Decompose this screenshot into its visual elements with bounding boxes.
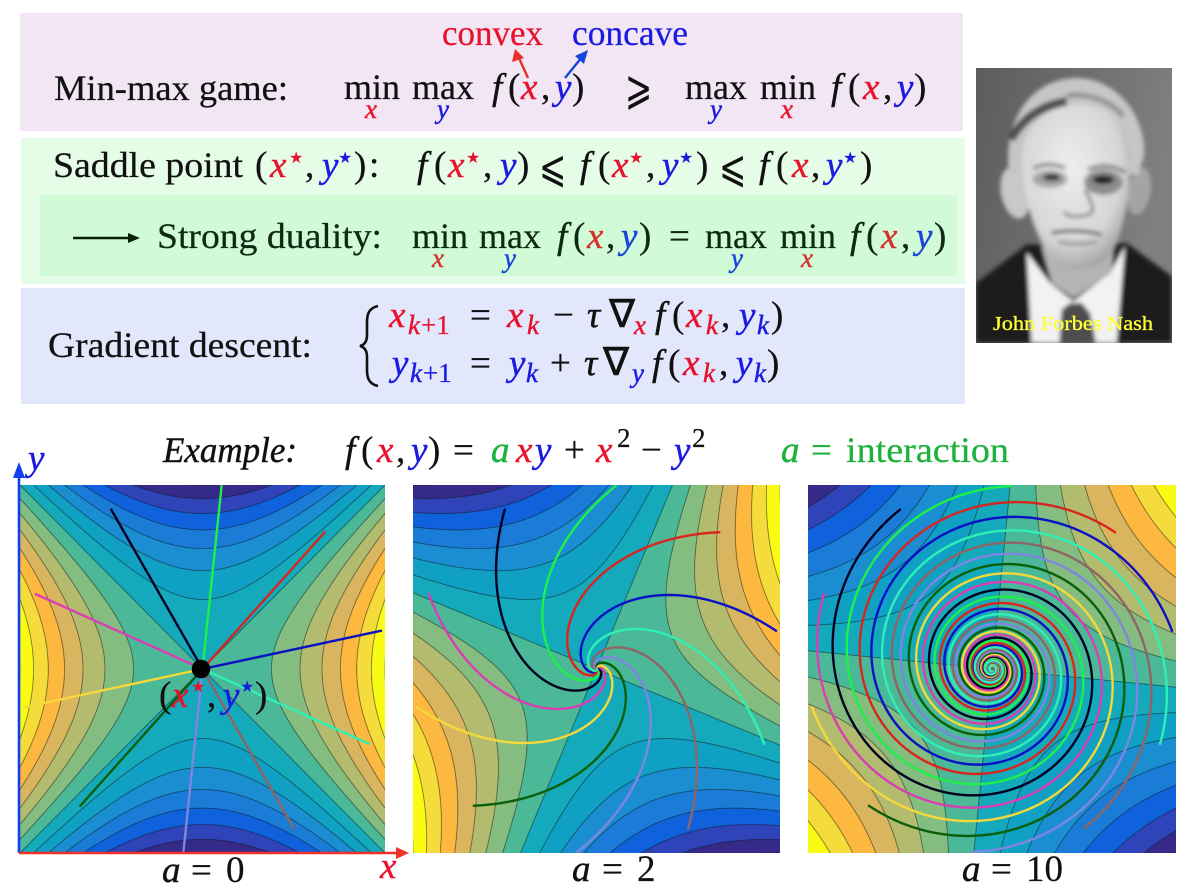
formula: saddle inequality: x (611, 145, 629, 186)
formula: y update: , (719, 343, 728, 384)
formula: strong duality equality: y (617, 216, 638, 257)
formula: max min f(x,y): x (780, 94, 793, 124)
formula: saddle inequality: ) (860, 145, 872, 186)
formula: strong duality equality (412, 216, 946, 273)
formula: saddle point coordinates: ★ (289, 148, 303, 167)
formula: x update (388, 293, 783, 340)
formula: min max f(x,y): f (492, 67, 507, 108)
formula: min max f(x,y): ) (572, 67, 584, 108)
formula: f(x,y) definition: x (515, 430, 533, 471)
formula: strong duality equality: ( (866, 216, 878, 257)
formula: y update: x (682, 343, 700, 384)
label: a = 0: 0 (226, 850, 244, 891)
panel: strong duality (40, 195, 957, 276)
formula: y update: +1 (423, 358, 452, 388)
formula: y update: y (629, 358, 644, 388)
label: saddle point (x*, y*): y (219, 675, 240, 716)
formula: strong duality equality: y (912, 216, 933, 257)
y axis arrow (13, 462, 25, 853)
formula: saddle inequality: , (483, 145, 492, 186)
arrow: to concave (565, 50, 588, 78)
saddle point marker (192, 660, 210, 678)
formula: x update: x (633, 310, 646, 340)
formula: saddle point coordinates: y (318, 145, 339, 186)
formula: f(x,y) definition: ) (428, 430, 440, 471)
label: saddle point (x*, y*): ( (159, 675, 171, 716)
formula: saddle inequality: f (417, 145, 432, 186)
label: a = 10: = (991, 849, 1012, 890)
formula: strong duality equality: min (780, 216, 836, 256)
formula: saddle inequality: ★ (843, 148, 857, 167)
formula: y update: ∇ (602, 341, 630, 384)
formula: saddle point coordinates (255, 145, 379, 186)
label: gradient descent: Gradient descent: (48, 325, 312, 365)
formula: max min f(x,y): , (883, 67, 892, 108)
formula: y update: y (505, 343, 526, 384)
formula: saddle point coordinates: ) (354, 145, 366, 186)
label: y axis: y (24, 438, 45, 479)
formula: saddle inequality: f (759, 145, 774, 186)
formula: strong duality equality: = (669, 216, 690, 257)
formula: f(x,y) definition: , (396, 430, 405, 471)
formula: max min f(x,y): min (760, 67, 816, 107)
label: a = 10: a (962, 849, 980, 890)
formula: saddle inequality: ⩽ (539, 142, 566, 193)
label: min-max game: Min-max game: (54, 68, 288, 108)
formula: x update: x (685, 295, 703, 336)
formula: f(x,y) definition: 2 (692, 423, 706, 453)
formula: saddle point coordinates: ( (255, 145, 267, 186)
formula: saddle inequality: ( (434, 145, 446, 186)
formula: min max f(x,y): x (520, 67, 538, 108)
arrow: to convex (512, 49, 528, 78)
label: a = 10: 10 (1026, 849, 1063, 890)
formula: saddle inequality (417, 142, 872, 193)
label: saddle point (x*, y*) (159, 675, 267, 716)
formula: strong duality equality: ) (934, 216, 946, 257)
formula: strong duality equality: f (557, 216, 572, 257)
label: saddle point (x*, y*): x (171, 675, 189, 716)
formula: max min f(x,y): y (893, 67, 914, 108)
x axis arrow (19, 847, 409, 859)
formula: f(x,y) definition: y (407, 430, 428, 471)
formula: min max f(x,y): x (364, 94, 377, 124)
formula: f(x,y) definition: a (491, 430, 510, 471)
label: a = 2: = (602, 849, 623, 890)
formula: min max f(x,y): y (434, 94, 449, 124)
formula: x update: x (388, 295, 406, 336)
formula: max min f(x,y) (685, 67, 926, 124)
formula: f(x,y) definition: y (531, 430, 552, 471)
formula: saddle inequality: y (822, 145, 843, 186)
formula: f(x,y) definition: x (595, 430, 613, 471)
caption: John Forbes Nash: John Forbes Nash (993, 313, 1153, 335)
formula: y update: = (470, 343, 491, 384)
formula: saddle inequality: ) (696, 145, 708, 186)
formula: x update: x (506, 295, 524, 336)
formula: f(x,y) definition: + (564, 430, 585, 471)
formula: strong duality equality: ) (639, 216, 651, 257)
label: convex: convex (442, 13, 543, 53)
formula: f(x,y) definition: = (453, 430, 474, 471)
formula: f(x,y) definition: − (641, 430, 662, 471)
formula: x update: = (470, 295, 491, 336)
formula: f(x,y) definition: x (376, 430, 394, 471)
formula: strong duality equality: x (800, 243, 813, 273)
formula: min max f(x,y): min (344, 67, 400, 107)
formula: max min f(x,y): y (707, 94, 722, 124)
formula: saddle inequality: y (496, 145, 517, 186)
formula: strong duality equality: y (501, 243, 516, 273)
label: a = 10 (962, 849, 1063, 890)
arrow: implies (73, 233, 140, 243)
label: a = 0: = (191, 850, 212, 891)
formula: f(x,y) definition: f (345, 430, 360, 471)
symbol: greater or equal: ⩾ (625, 60, 652, 116)
contour plot: a = 10 with tightly wound spiral trajectories (808, 485, 1176, 853)
formula: strong duality equality: x (880, 216, 898, 257)
contour plot: a = 0 with straight gradient trajectories (20, 485, 385, 853)
formula: f(x,y) definition: y (670, 430, 691, 471)
formula: max min f(x,y): ) (914, 67, 926, 108)
label: concave: concave (572, 13, 688, 53)
icon: left brace (360, 306, 378, 386)
formula: saddle inequality: x (447, 145, 465, 186)
formula: max min f(x,y): x (862, 67, 880, 108)
formula: saddle point coordinates: x (269, 145, 287, 186)
formula: strong duality equality: min (412, 216, 468, 256)
formula: x update: ∇ (608, 293, 636, 336)
panel: saddle point (21, 138, 965, 284)
formula: saddle inequality: ( (598, 145, 610, 186)
formula: strong duality equality: x (586, 216, 604, 257)
formula: saddle inequality: ★ (629, 148, 643, 167)
formula: y update: ) (767, 343, 779, 384)
label: a = 2: 2 (637, 849, 656, 890)
formula: y update: y (732, 343, 753, 384)
formula: saddle inequality: f (580, 145, 595, 186)
formula: y update: k (703, 358, 716, 388)
formula: y update: k (410, 358, 423, 388)
formula: x update: k (408, 310, 421, 340)
formula: strong duality equality: , (901, 216, 910, 257)
label: a = 2: a (572, 849, 590, 890)
formula: saddle inequality: ( (776, 145, 788, 186)
formula: x update: ( (672, 295, 684, 336)
label: a = interaction (781, 430, 1009, 471)
formula: y update: k (754, 358, 767, 388)
label: a = 0 (162, 850, 244, 891)
formula: y update: f (652, 343, 667, 384)
formula: strong duality equality: y (728, 243, 743, 273)
contour plot: a = 2 with spiralling trajectories (413, 485, 780, 853)
formula: x update: y (735, 295, 756, 336)
photo: portrait of John Forbes Nash (976, 68, 1172, 343)
formula: x update: ) (771, 295, 783, 336)
formula: f(x,y) definition: ( (361, 430, 373, 471)
label: x axis: x (379, 846, 397, 887)
label: saddle point: Saddle point (53, 145, 243, 185)
formula: x update: k (527, 310, 540, 340)
formula: saddle point coordinates: : (369, 145, 379, 186)
formula: saddle inequality: ) (517, 145, 529, 186)
formula: min max f(x,y): y (551, 67, 572, 108)
panel: gradient descent (21, 288, 965, 404)
formula: max min f(x,y): ( (848, 67, 860, 108)
formula: x update: k (706, 310, 719, 340)
formula: x update: +1 (421, 310, 450, 340)
formula: x update: − (553, 295, 574, 336)
label: saddle point (x*, y*): , (207, 675, 216, 716)
heading: example function (162, 423, 1009, 471)
formula: strong duality equality: x (431, 243, 444, 273)
formula: y update: ( (668, 343, 680, 384)
label: a = interaction: a (781, 430, 800, 471)
formula: strong duality equality: f (850, 216, 865, 257)
formula: f(x,y) definition (345, 423, 706, 471)
formula: y update (388, 341, 779, 388)
formula: x update: , (721, 295, 730, 336)
formula: x update: k (757, 310, 770, 340)
formula: y update: + (550, 343, 571, 384)
formula: min max f(x,y) (344, 67, 584, 124)
formula: max min f(x,y): max (685, 67, 747, 107)
formula: saddle inequality: ★ (466, 148, 480, 167)
formula: saddle point coordinates: ★ (338, 148, 352, 167)
formula: f(x,y) definition: 2 (617, 423, 630, 453)
formula: saddle inequality: x (791, 145, 809, 186)
formula: strong duality equality: ( (573, 216, 585, 257)
formula: saddle inequality: ⩽ (719, 142, 746, 193)
label: a = 0: a (162, 850, 180, 891)
label: example: Example: (162, 430, 297, 470)
formula: y update: y (388, 343, 409, 384)
formula: strong duality equality: max (705, 216, 767, 256)
label: a = interaction: = (811, 430, 832, 471)
label: saddle point (x*, y*): ) (255, 675, 267, 716)
label: saddle point (x*, y*): ★ (240, 677, 254, 696)
label: strong duality: Strong duality: (157, 216, 382, 256)
formula: saddle point coordinates: , (305, 145, 314, 186)
panel: min-max game (20, 13, 963, 131)
formula: y update: k (526, 358, 539, 388)
formula: x update: f (655, 295, 670, 336)
formula: min max f(x,y): , (541, 67, 550, 108)
label: saddle point (x*, y*): ★ (191, 677, 205, 696)
formula: saddle inequality: ★ (679, 148, 693, 167)
formula: min max f(x,y): ( (508, 67, 520, 108)
formula: strong duality equality: max (479, 216, 541, 256)
formula: saddle inequality: , (646, 145, 655, 186)
formula: max min f(x,y): f (831, 67, 846, 108)
formula: y update: τ (584, 343, 599, 384)
formula: strong duality equality: , (606, 216, 615, 257)
label: a = interaction: interaction (846, 430, 1009, 470)
formula: min max f(x,y): max (412, 67, 474, 107)
formula: x update: τ (587, 295, 602, 336)
formula: saddle inequality: , (811, 145, 820, 186)
label: a = 2 (572, 849, 656, 890)
formula: saddle inequality: y (658, 145, 679, 186)
